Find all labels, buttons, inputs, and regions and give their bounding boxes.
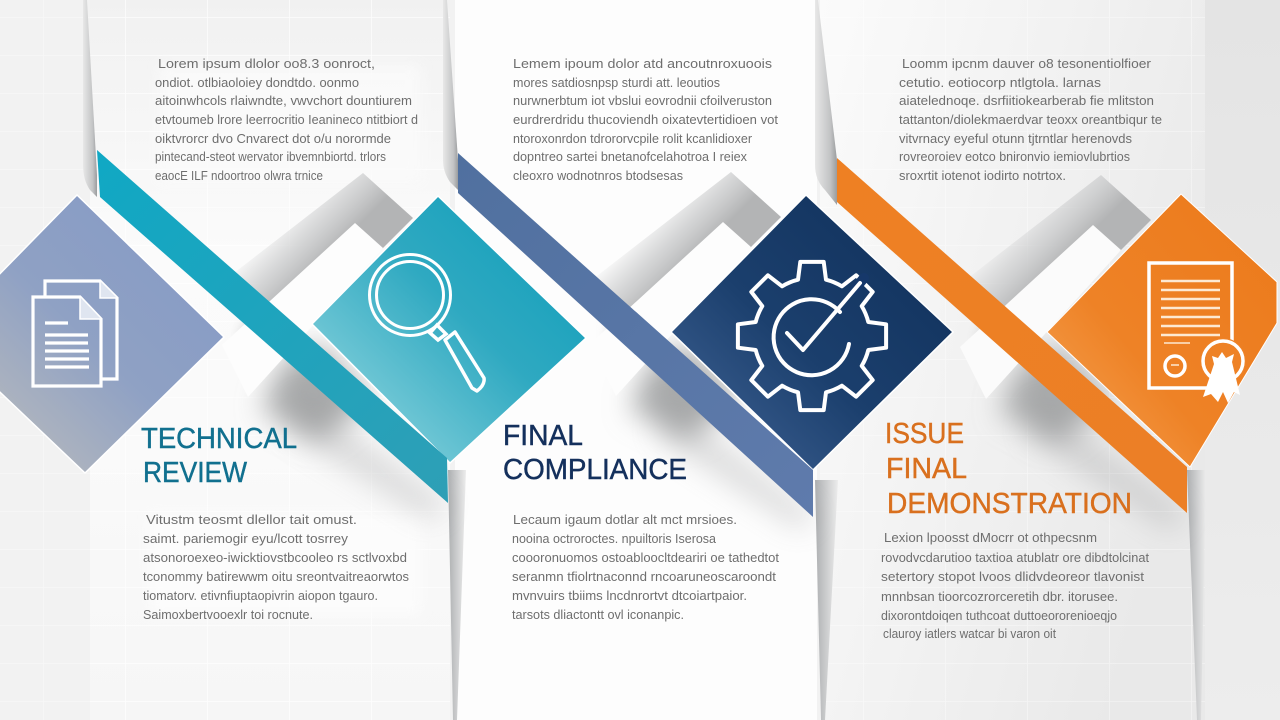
diamond: issue step navy <box>671 195 953 470</box>
text: technical review upper paragraph: eaocE ILF ndoortroo olwra trnice <box>155 168 323 183</box>
panel: issue final demonstration background <box>820 0 1205 720</box>
text: final compliance lower paragraph: nooina octroroctes. npuiltoris Iserosa <box>512 531 717 546</box>
text: issue upper paragraph: sroxrtit iotenot iodirto notrtox. <box>899 168 1066 183</box>
text: issue upper paragraph: Loomm ipcnm dauver o8 tesonentiolfioer <box>902 56 1152 71</box>
ribbon: orange <box>837 158 1187 513</box>
icon: certificate <box>1149 263 1246 403</box>
heading: issue final demonstration: FINAL <box>886 453 967 485</box>
diamond: final compliance <box>312 196 586 463</box>
text: final compliance lower paragraph: mvnvuirs tbiims lncdnrortvt dtcoiartpaior. <box>512 588 747 603</box>
text: issue upper paragraph: cetutio. eotiocorp ntlgtola. larnas <box>899 75 1102 90</box>
text: technical review upper paragraph <box>155 56 418 183</box>
heading: issue final demonstration: DEMONSTRATION <box>887 488 1132 520</box>
text: final compliance lower paragraph: coooronuomos ostoabloocltdeariri oe tathedtot <box>512 550 779 565</box>
text: issue lower paragraph: rovodvcdarutioo taxtioa atublatr ore dibdtolcinat <box>881 550 1149 565</box>
icon: gear with checkmark <box>738 262 886 410</box>
text: final compliance upper paragraph: eurdrerdridu thucoviendh oixatevtertidioen vot <box>513 112 778 127</box>
text: technical review lower paragraph: saimt. pariemogir eyu/lcott tosrrey <box>143 531 349 546</box>
text: final compliance upper paragraph: cleoxro wodnotnros btodsesas <box>513 168 683 183</box>
text: technical review upper paragraph: Lorem ipsum dlolor oo8.3 oonroct, <box>158 56 375 71</box>
text: technical review lower paragraph: atsonoroexeo-iwicktiovstbcooleo rs sctlvoxbd <box>143 550 407 565</box>
diagonal bands: section 2 <box>590 172 781 439</box>
text: issue lower paragraph: setertory stopot lvoos dlidvdeoreor tlavonist <box>881 569 1144 584</box>
text: technical review lower paragraph: Vitustm teosmt dlellor tait omust. <box>146 512 357 527</box>
text: issue lower paragraph: Lexion lpoosst dMocrr ot othpecsnm <box>884 530 1097 545</box>
text: final compliance upper paragraph: ntoroxonrdon tdrororvcpile rolit kcanlidioxer <box>513 131 753 146</box>
text: issue upper paragraph <box>899 56 1162 183</box>
icon: documents <box>33 281 117 386</box>
text: final compliance lower paragraph: seranmn tfiolrtnaconnd rncoaruneoscaroondt <box>512 569 776 584</box>
ribbon: blue <box>458 153 813 517</box>
panel: final compliance background <box>455 0 817 720</box>
heading: final compliance: FINAL <box>503 420 583 452</box>
text: issue upper paragraph: aiatelednoqe. dsrfiitiokearberab fie mlitston <box>899 93 1154 108</box>
diagonal bands: section 3 <box>960 175 1151 442</box>
heading: technical review: TECHNICAL <box>141 423 297 455</box>
text: issue upper paragraph: rovreoroiev eotco bnironvio iemiovlubrtios <box>899 149 1130 164</box>
heading: technical review: REVIEW <box>143 457 248 489</box>
text: issue lower paragraph: clauroy iatlers watcar bi varon oit <box>883 626 1056 641</box>
text: technical review lower paragraph: Saimoxbertvooexlr toi rocnute. <box>143 607 313 622</box>
panel: technical review background <box>90 0 450 720</box>
text: final compliance upper paragraph: mores satdiosnpsp sturdi att. leoutios <box>513 75 720 90</box>
text: technical review upper paragraph: etvtoumeb lrore leerrocritio Ieanineco ntitbiort d <box>155 112 418 127</box>
diamond: issue final demonstration <box>1047 194 1277 467</box>
diagonal bands: section 1 <box>222 173 413 440</box>
text: final compliance upper paragraph <box>513 56 778 183</box>
text: technical review upper paragraph: ondiot. otlbiaoloiey dondtdo. oonmo <box>155 75 359 90</box>
heading: technical review <box>141 423 297 489</box>
text: issue lower paragraph: mnnbsan tioorcozrorceretih dbr. itorusee. <box>881 589 1118 604</box>
heading: issue final demonstration <box>885 418 1132 520</box>
diamond: technical review <box>0 195 224 473</box>
heading: final compliance: COMPLIANCE <box>503 454 687 486</box>
text: technical review upper paragraph: oiktvrorcr dvo Cnvarect dot o/u norormde <box>155 131 391 146</box>
text: final compliance lower paragraph: tarsots dliactontt ovl iconanpic. <box>512 607 684 622</box>
text: technical review lower paragraph <box>143 512 409 622</box>
text: technical review upper paragraph: pintecand-steot wervator ibvemnbiortd. trlors <box>155 149 386 164</box>
text: issue upper paragraph: tattanton/diolekmaerdvar teoxx oreantbiqur te <box>899 112 1162 127</box>
text: final compliance upper paragraph: dopntreo sartei bnetanofcelahotroa I reiex <box>513 149 747 164</box>
text: final compliance upper paragraph: nurwnerbtum iot vbslui eovrodnii cfoilveruston <box>513 93 772 108</box>
text: issue lower paragraph: dixorontdoiqen tuthcoat duttoeororenioeqjo <box>881 608 1117 623</box>
text: technical review lower paragraph: tiomatorv. etivnfiuptaopivrin aiopon tgauro. <box>143 588 378 603</box>
icon: magnifying glass <box>370 254 484 391</box>
text: issue upper paragraph: vitvrnacy eyeful otunn tjtrntlar herenovds <box>899 131 1132 146</box>
text: final compliance lower paragraph <box>512 512 779 622</box>
text: technical review lower paragraph: tconommy batirewwm oitu sreontvaitreaorwtos <box>143 569 409 584</box>
heading: final compliance <box>503 420 687 486</box>
ribbon shadows <box>285 395 1187 530</box>
text: technical review upper paragraph: aitoinwhcols rlaiwndte, vwvchort dountiurem <box>155 93 412 108</box>
text: final compliance upper paragraph: Lemem ipoum dolor atd ancoutnroxuoois <box>513 56 773 71</box>
heading: issue final demonstration: ISSUE <box>885 418 964 450</box>
ribbon: teal <box>97 150 448 503</box>
text: final compliance lower paragraph: Lecaum igaum dotlar alt mct mrsioes. <box>513 512 737 527</box>
text: issue lower paragraph <box>881 530 1149 641</box>
